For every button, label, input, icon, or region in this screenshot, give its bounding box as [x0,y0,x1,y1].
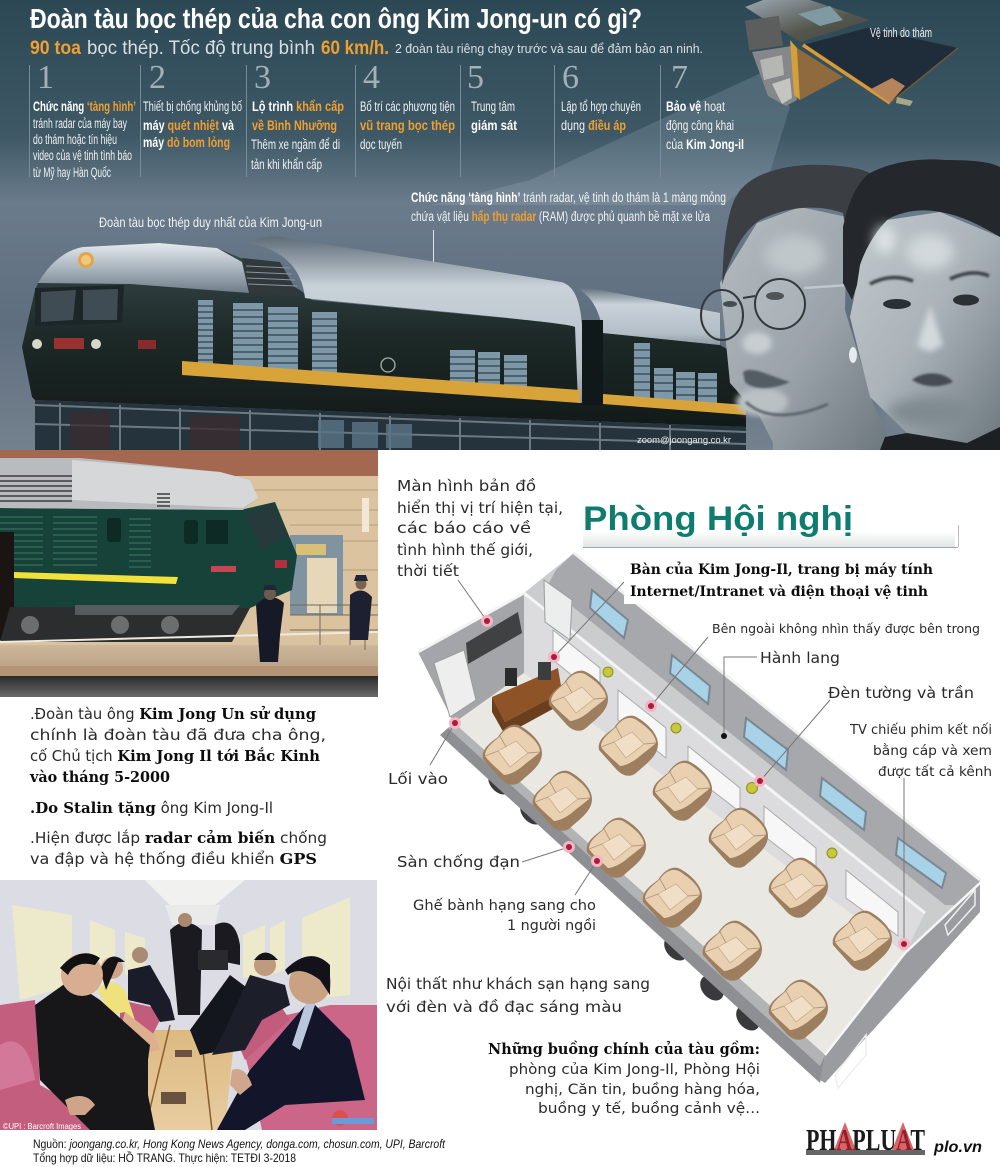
column 6 [554,59,641,177]
icon: satellite [745,0,958,106]
caption: map screen: Màn hình bản đồ [397,477,536,495]
column 4: Bố trí các phương tiện [360,99,455,114]
desk of Kim Jong-Il [492,662,562,735]
column 3: 3 [254,59,271,96]
caption: TV: bằng cáp và xem [873,742,992,759]
portrait: Kim Jong-un [843,159,1000,450]
photo credit: ©UPI : Barcroft Images [3,1122,81,1131]
column 1 [29,59,136,180]
column 6: dụng điều áp [561,118,626,133]
caption: TV: được tất cả kênh [878,764,992,780]
column 5: Trung tâm [471,99,515,114]
wheels [483,765,765,1035]
column 7: của Kim Jong-il [666,137,744,152]
caption: interior: Nội thất như khách sạn hạng sang [386,975,650,993]
column 2: máy dò bom lỏng [143,135,230,150]
man at left [35,953,155,1130]
man at right [217,956,365,1130]
text block: train facts: va đập và hệ thống điều khiển GPS [30,850,317,868]
logo: Pháp Luật: plo.vn [933,1139,982,1156]
wall lamps [603,667,837,858]
panel: hero section with armoured train [0,0,1000,450]
photo: green locomotive at station [0,450,378,697]
portrait: Kim Jong-il [701,165,890,450]
column 7: 7 [671,59,688,96]
caption: desk: Internet/Intranet và điện thoại vệ tinh [630,584,928,600]
subtitle: bọc thép. Tốc độ trung bình [87,38,315,59]
column 5 [460,59,517,177]
armchairs [483,671,892,1040]
column 3: tản khi khẩn cấp [251,157,322,172]
photo: passengers inside carriage [0,880,377,1131]
caption: map screen [397,477,563,580]
photo credit: zoom@joongang.co.kr [637,435,731,445]
text block: train facts: .Đoàn tàu ông Kim Jong Un sử dụng [30,705,316,723]
caption: corridor: Hành lang [760,649,840,667]
column 2: máy quét nhiệt và [143,118,234,133]
text block: train facts: .Do Stalin tặng ông Kim Jong-Il [30,799,273,817]
map screen [466,612,522,664]
caption: interior [386,975,650,1016]
caption: armchairs [413,897,596,934]
column 5: 5 [467,59,484,96]
stealth callout: chứa vật liệu hấp thụ radar (RAM) được phủ quanh bề mặt xe lửa [411,209,710,224]
caption: entrance: Lối vào [388,770,448,788]
column 7: động công khai [666,118,734,133]
column 1: do thám hoặc tín hiệu [33,132,117,147]
source credits: Tổng hợp dữ liệu: HỒ TRANG. Thực hiện: TETĐI 3-2018 [33,1150,296,1165]
caption: map screen: hiển thị vị trí hiện tại, [397,499,563,517]
icon: KCNA logo [332,1110,374,1126]
conference room floor plan [418,553,980,1088]
heading: conference room: Phòng Hội nghị [583,500,853,538]
caption: map screen: tình hình thế giới, [397,541,533,559]
column 1: tránh radar của máy bay [33,116,127,131]
train label: Đoàn tàu bọc thép duy nhất của Kim Jong-un [99,215,322,230]
column 3: Thêm xe ngầm để di [251,137,340,152]
caption: main compartments: Những buồng chính của tàu gồm: [488,1040,760,1058]
text block: train facts: cố Chủ tịch Kim Jong Il tới Bắc Kinh [30,747,320,765]
caption: interior: với đèn và đồ đạc sáng màu [386,998,622,1016]
pink sofas [0,1000,377,1130]
caption: desk [630,561,933,600]
stealth callout [411,190,726,262]
heading: conference room [583,500,959,548]
column 3: Lộ trình khẩn cấp [252,99,344,114]
column 4: 4 [363,59,380,96]
source credits [33,1137,446,1165]
caption: map screen: các báo cáo về [397,519,531,537]
caption: TV [849,721,992,780]
leader lines [430,580,904,944]
caption: one-way windows: Bên ngoài không nhìn thấy được bên trong [712,621,980,636]
satellite label: Vệ tinh do thám [870,26,932,40]
caption: armchairs: 1 người ngồi [507,917,596,934]
column 1: 1 [37,59,54,96]
white label plate behind desk caption [624,548,960,604]
subtitle: 2 đoàn tàu riêng chạy trước và sau để đảm bảo an ninh. [395,41,703,56]
caption: bulletproof floor: Sàn chống đạn [397,853,520,871]
caption: desk: Bàn của Kim Jong-Il, trang bị máy tính [630,561,933,578]
column 7 [660,59,744,177]
subtitle: 90 toa [30,38,81,59]
satellite beam [432,72,790,205]
column 6: Lập tổ hợp chuyên [561,99,641,114]
column 2: 2 [149,59,166,96]
radiators [553,630,898,936]
logo: Pháp Luật: PHAPLUAT [806,1122,925,1157]
text block: train facts [29,705,327,868]
column 6: 6 [562,59,579,96]
column 4: dọc tuyến [360,137,402,152]
column 4 [355,59,455,177]
source credits: Nguồn: joongang.co.kr, Hong Kong News Agency, donga.com, chosun.com, UPI, Barcroft [33,1137,446,1151]
column 7: Bảo vệ hoạt [666,99,725,114]
caption: TV: TV chiếu phim kết nối [849,721,992,738]
column 1: từ Mỹ hay Hàn Quốc [33,165,111,180]
guard figures [256,575,372,662]
column 1: video của vệ tinh tình báo [33,148,132,163]
marker dots [449,615,910,950]
column 1: Chức năng ‘tàng hình’ [33,99,136,114]
door [434,650,476,717]
text block: train facts: vào tháng 5-2000 [29,768,170,786]
column 5: giám sát [471,118,517,133]
armoured train illustration [22,236,746,450]
column 2 [140,59,242,177]
woman in yellow [98,957,160,1052]
subtitle: 60 km/h. [321,38,389,59]
photographers and guests [128,913,290,1055]
subtitle [30,38,703,59]
caption: map screen: thời tiết [397,562,459,580]
caption: main compartments: nghị, Căn tin, buồng hàng hóa, [525,1081,760,1098]
text block: train facts: .Hiện được lắp radar cảm biến chống [30,829,327,847]
column 4: vũ trang bọc thép [360,118,455,133]
windows [590,590,946,888]
caption: lights: Đèn tường và trần [828,684,974,702]
column 3: về Bình Nhưỡng [252,118,337,133]
column 3 [246,59,344,177]
caption: main compartments: phòng của Kim Jong-Il, Phòng Hội [509,1062,760,1078]
column 2: Thiết bị chống khủng bố [143,99,242,114]
text block: train facts: chính là đoàn tàu đã đưa cha ông, [30,726,326,744]
title: Đoàn tàu bọc thép của cha con ông Kim Jong-un có gì? [30,3,642,34]
stealth callout: Chức năng ‘tàng hình’ tránh radar, vệ tinh do thám là 1 màng mỏng [411,190,726,205]
caption: main compartments: buồng y tế, buồng cảnh vệ... [538,1100,760,1117]
caption: armchairs: Ghế bành hạng sang cho [413,897,596,914]
caption: main compartments [488,1040,760,1117]
